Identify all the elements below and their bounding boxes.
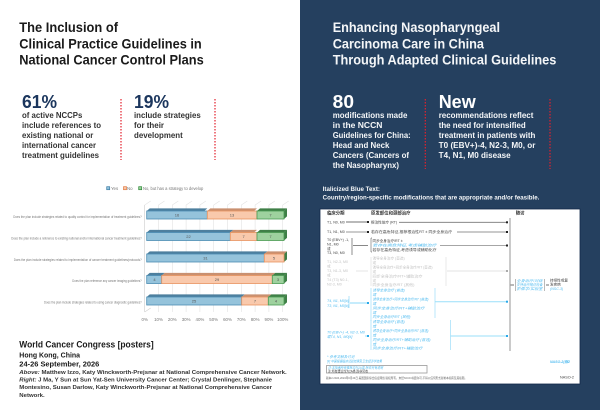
flowchart row: blue group one: 同步全身治疗/RT+辅助治疗 xyxy=(372,306,426,310)
flowchart row: blue group one: 或 xyxy=(372,301,376,306)
question labels: Does the plan include strategies related to using cancer diagnostic guidelines? xyxy=(44,301,142,305)
bar row 3 xyxy=(147,251,287,262)
flowchart row: blue group one xyxy=(327,288,508,321)
stat: 19 percent: include strategies xyxy=(134,111,201,120)
flowchart row: blue group one: 或 xyxy=(372,292,376,297)
stat: 80 modifications: Cancers (Cancers of xyxy=(333,151,409,160)
flowchart row: T0 EBV group: 或 xyxy=(327,246,331,251)
flowchart row: gray group: T1, N2-3, M0 xyxy=(327,260,348,264)
axis labels: 50% xyxy=(209,317,218,322)
bar row 4: 3 xyxy=(277,277,280,282)
axis labels: 100% xyxy=(277,317,288,322)
flowchart follow-up branch: 持续性或复 xyxy=(550,278,568,282)
stat: 80 modifications: Guidelines for China: xyxy=(333,131,411,140)
stat: 19 percent: for their xyxy=(134,121,164,130)
text block: event and credits: Montesino, Susan Darlow, Katy Winckworth-Prejsnar at National Comprehensive Cancer xyxy=(19,385,273,391)
stat: 61 percent: include references to xyxy=(22,121,101,130)
flowchart follow-up branch xyxy=(510,278,568,291)
stat: new recommendations: New xyxy=(439,92,477,112)
flowchart row: gray group: T4 (T3) N0-1, xyxy=(327,278,349,282)
stat: 61 percent xyxy=(22,92,101,160)
stat: 61 percent: of active NCCPs xyxy=(22,111,83,120)
flowchart column headers: 原发部位和颈部治疗 xyxy=(371,210,411,216)
flowchart row: blue group two: 或T4, N1, M0[#] xyxy=(327,334,353,339)
flowchart footnotes: 版本2.2024,2024年6月24日 美国国家综合癌症网络 版权所有。未经NCCN书面许可,不得以任何形式复制本指南及其插图。 xyxy=(326,376,467,380)
heading: right title: Carcinoma Care in China xyxy=(333,36,484,52)
flowchart row: blue group one: 诱导全身治疗 (首选) xyxy=(372,288,405,292)
flowchart row: T1 N1 M0: T1, N1, M0 xyxy=(327,230,345,234)
flowchart row: gray group: T3, N1-3, M0 xyxy=(327,269,348,273)
bar row 1 xyxy=(147,208,287,219)
axis labels: 20% xyxy=(168,317,177,322)
heading: left title: The Inclusion of xyxy=(19,19,118,35)
question labels xyxy=(11,215,142,305)
stat: 80 modifications: in the NCCN xyxy=(333,121,383,130)
bar row 2: 7 xyxy=(242,234,245,239)
bar row 2 xyxy=(147,230,287,240)
stat: 80 modifications: 80 xyxy=(333,92,354,112)
flowchart row: blue group two: 或 xyxy=(372,342,376,346)
flowchart footnotes: NASO-2 xyxy=(560,374,575,380)
flowchart row: blue group one: T4, N1, M0[#] xyxy=(327,299,350,303)
axis labels: 0% xyxy=(142,317,148,322)
flowchart footnotes: * 参考文献及讨论 xyxy=(327,354,355,359)
heading: left title: National Cancer Control Plans xyxy=(19,52,204,68)
flowchart row: gray group: 同步全身治疗/RT+辅助治疗 xyxy=(372,274,423,278)
axis labels: 70% xyxy=(237,317,246,322)
axis labels: 30% xyxy=(182,317,191,322)
stat: 19 percent xyxy=(134,92,201,140)
text block: event and credits: Hong Kong, China xyxy=(19,350,81,359)
axis labels: 40% xyxy=(196,317,204,322)
flowchart row: gray group: 或 xyxy=(372,278,376,283)
stat: 80 modifications: the Nasopharynx) xyxy=(333,161,399,170)
flowchart row: gray group: 或 xyxy=(327,264,331,268)
flowchart column headers xyxy=(327,210,525,216)
text block: event and credits: Above: Matthew Izzo, Katy Winckworth-Prejsnar at National Comprehensive Cancer Network. xyxy=(18,370,287,376)
flowchart column headers: 随访 xyxy=(516,210,525,216)
flowchart row: T1 N0 M0: T1, N0, M0 xyxy=(327,220,345,224)
stat: 19 percent: development xyxy=(134,131,183,140)
question labels: Does the plan include a reference to existing national and/or international cancer treatment guidelines? xyxy=(11,236,142,240)
text block: event and credits: 24-26 September, 2026 xyxy=(19,360,99,369)
bar row 2: 7 xyxy=(269,234,272,239)
stat: new recommendations: the need for intensified xyxy=(439,121,526,130)
flowchart row: blue group two: 诱导全身治疗 (首选) xyxy=(372,319,405,324)
flowchart row: T1 N0 M0: 根治性放疗 (RT) xyxy=(371,220,397,224)
axis labels: 10% xyxy=(154,317,163,322)
axis labels: 80% xyxy=(251,317,260,322)
stat: 61 percent: existing national or xyxy=(22,131,93,140)
panel: right navy background xyxy=(300,0,600,410)
flowchart row: T0 EBV group: T0 (EBV+) -1, xyxy=(327,238,349,242)
flowchart follow-up branch: 支持治疗随访检查 xyxy=(516,282,544,287)
flowchart row: blue group two: 或 xyxy=(372,332,376,338)
flowchart row: T0 EBV group: 若存在高危特征,考虑诱导或辅助化疗 xyxy=(372,247,437,252)
question labels: Does the plan reference any cancer imaging guidelines? xyxy=(72,279,142,283)
flowchart follow-up branch: 影像学/实验室 xyxy=(516,286,544,291)
bar row 1: 7 xyxy=(269,212,272,218)
text block: event and credits xyxy=(18,340,287,399)
flowchart column headers: 临床分期 xyxy=(327,210,345,216)
flowchart row: gray group: 或 xyxy=(372,260,376,265)
flowchart footnotes: 注:本指南所有推荐均为2A类,除非另有说明 xyxy=(328,365,384,370)
bar row 3: 5 xyxy=(273,256,276,260)
flowchart vertical follow-up bar xyxy=(509,218,511,351)
bar row 5: 7 xyxy=(254,298,257,304)
bar row 5: 25 xyxy=(192,298,197,304)
panel: left NCCP summary xyxy=(19,19,215,160)
text block: event and credits: World Cancer Congress [posters] xyxy=(19,340,154,350)
flowchart row: blue group two: 诱导全身治疗+同步全身治疗/RT (首选) xyxy=(372,328,428,333)
chart: stacked 3D bar chart xyxy=(11,186,289,322)
stat: new recommendations: recommendations reflect xyxy=(439,111,534,120)
text block: italicized blue text note: Italicized Blue Text: xyxy=(323,187,380,193)
text block: italicized blue text note: Country/region-specific modifications that are appropriate and/or feasible. xyxy=(323,196,540,202)
text block: event and credits: Right: J Ma, Y Sun at Sun Yat-Sen University Cancer Center; Crystal Denlinger, Stephanie xyxy=(19,378,272,384)
heading: left title xyxy=(19,19,204,68)
chart gridlines xyxy=(145,201,289,312)
flowchart row: blue group one: 同步全身治疗/RT (其他) xyxy=(372,314,410,319)
panel: NCCN China flowchart xyxy=(320,209,580,384)
stat: new recommendations: T4, N1, M0 disease xyxy=(439,151,511,160)
text block: event and credits: Network. xyxy=(19,393,45,399)
stat: new recommendations xyxy=(439,92,536,160)
flowchart footnotes: 注:所有建议均为2A类,除非另有 xyxy=(328,368,368,374)
flowchart follow-up branch: 发疾病 xyxy=(550,282,561,286)
question labels: Does the plan include strategies related to quality control for implementation of treatment guidelines? xyxy=(13,215,142,219)
flowchart row: T0 EBV group: 同步全身治疗/RT ± xyxy=(372,238,403,243)
flowchart row: blue group one: T3, N1, M0[#] xyxy=(327,304,350,308)
flowchart row: T0 EBV group: T3, N0, M0 xyxy=(327,251,345,255)
chart legend: No xyxy=(127,186,133,191)
chart legend xyxy=(107,186,204,191)
stat: new recommendations: T0 (EBV+)-4, N2-3, M0, or xyxy=(439,141,535,150)
flowchart row: gray group: 或 xyxy=(327,272,331,278)
chart legend: No, but has a strategy to develop xyxy=(143,186,204,191)
flowchart footnotes: NASO-2(版2 xyxy=(550,359,570,364)
flowchart row: T1 N1 M0 xyxy=(327,229,508,234)
bar row 3: 31 xyxy=(203,256,208,260)
bar row 4: 4 xyxy=(153,277,156,282)
bar row 2: 22 xyxy=(186,234,191,239)
flowchart row: T1 N1 M0: 若存在高危特征,推荐根治性RT ± 同步全身治疗 xyxy=(371,229,452,234)
flowchart footnotes: [#] 中国根据临床试验结果及卫生经济学结果 xyxy=(326,358,382,364)
flowchart row: gray group: N2-3, M0 xyxy=(327,282,342,286)
bar row 1: 13 xyxy=(230,212,235,218)
flowchart row: gray group: 同步全身治疗/RT (其他) xyxy=(372,282,414,287)
flowchart row: blue group two: 同步全身治疗/RT+辅助治疗 xyxy=(372,346,424,350)
flowchart row: T0 EBV group: 若存在高危特征,考虑辅助治疗 xyxy=(372,242,438,248)
stat: new recommendations: treatment in patients with xyxy=(439,131,536,140)
flowchart footnotes xyxy=(326,354,575,380)
flowchart row: blue group two xyxy=(327,319,508,350)
heading: right title: Through Adapted Clinical Guidelines xyxy=(333,52,557,68)
stat: 80 modifications: Head and Neck xyxy=(333,141,390,150)
bar row 1: 16 xyxy=(175,212,180,218)
flowchart row: blue group one: 诱导全身治疗+同步全身治疗/RT (首选) xyxy=(372,296,428,302)
text block: italicized blue text note xyxy=(323,187,540,202)
bar row 5 xyxy=(147,294,287,305)
chart legend: Yes xyxy=(111,186,119,191)
stat: 19 percent: 19% xyxy=(134,92,169,112)
heading: right title xyxy=(333,19,557,68)
stat: 61 percent: treatment guidelines xyxy=(22,151,100,160)
question labels: Does the plan include strategies related to implementation of cancer treatment guidelines/protocols? xyxy=(14,258,142,262)
flowchart row: gray group: 或 xyxy=(372,269,376,274)
stat: 61 percent: international cancer xyxy=(22,141,96,150)
flowchart row: gray group xyxy=(327,256,508,287)
flowchart row: blue group two: 或 xyxy=(372,324,376,328)
panel: right NPC summary xyxy=(323,19,557,202)
bar row 5: 4 xyxy=(275,298,278,304)
flowchart row: T0 EBV group xyxy=(327,238,508,255)
bar row 4 xyxy=(147,273,287,284)
heading: right title: Enhancing Nasopharyngeal xyxy=(333,19,500,35)
flowchart follow-up branch: (NSC-3) xyxy=(550,287,563,291)
axis labels: 90% xyxy=(265,317,273,322)
heading: left title: Clinical Practice Guidelines in xyxy=(19,36,202,52)
axis labels: 60% xyxy=(223,317,232,322)
bar row 4: 29 xyxy=(215,277,220,282)
flowchart follow-up branch: 全身治疗/对症 xyxy=(516,278,544,283)
stat: 61 percent: 61% xyxy=(22,92,57,112)
stat: 80 modifications xyxy=(333,92,411,170)
stat: 80 modifications: modifications made xyxy=(333,111,408,120)
flowchart row: blue group two: T0 (EBV+) -4, N2-3, M0 xyxy=(327,330,365,334)
flowchart row: blue group two: 同步全身治疗/RT+辅助治疗 (首选) xyxy=(372,337,430,342)
flowchart row: gray group: 诱导全身治疗 (首选) xyxy=(372,256,405,260)
axis labels xyxy=(142,317,288,322)
flowchart row: blue group one: 或 xyxy=(372,310,376,315)
flowchart row: T0 EBV group: N1, M0 xyxy=(327,242,339,246)
flowchart row: gray group: 诱导全身治疗+同步全身治疗/RT (首选) xyxy=(372,264,432,270)
flowchart row: T1 N0 M0 xyxy=(327,220,508,224)
